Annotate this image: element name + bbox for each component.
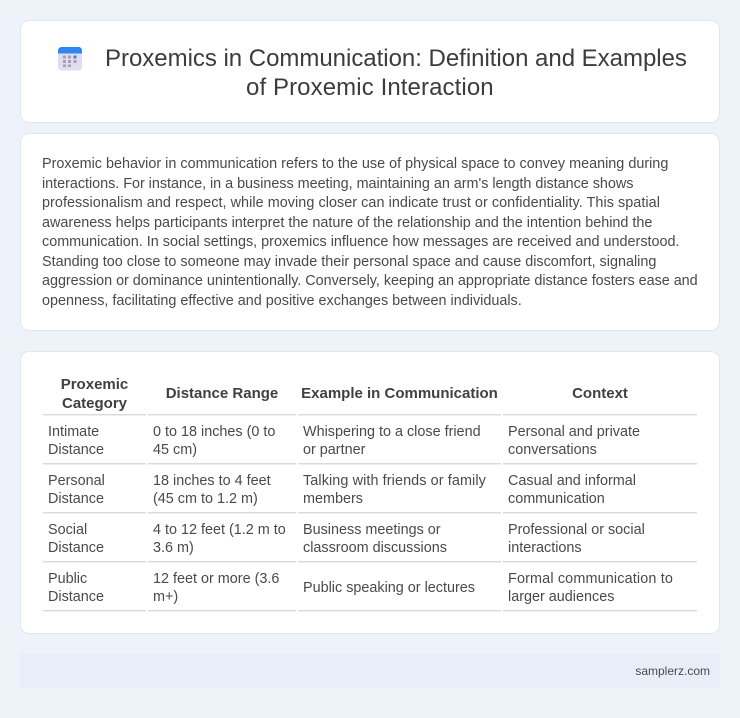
description text: professionalism and respect, while moving closer can indicate trust or confidentiality. This spatial [42, 195, 660, 211]
row: social distance [43, 522, 697, 563]
row: intimate distance: or partner [303, 442, 365, 458]
row: intimate distance: Intimate [48, 424, 99, 440]
row: intimate distance: Distance [48, 442, 104, 458]
title: Proxemics in Communication: Definition and Examples [105, 45, 687, 72]
row: intimate distance: Personal and private [508, 424, 640, 440]
row: public distance [43, 571, 697, 612]
row: intimate distance: Whispering to a close friend [303, 424, 481, 440]
row: public distance: Public speaking or lectures [303, 580, 475, 596]
row: social distance: Professional or social [508, 522, 645, 538]
row: public distance: Public [48, 571, 87, 587]
description text: Standing too close to someone may invade their personal space and cause discomfort, signaling [42, 254, 656, 270]
table header [43, 376, 697, 416]
description text: openness, facilitating effective and positive exchanges between individuals. [42, 292, 522, 308]
row: personal distance: 18 inches to 4 feet [153, 473, 271, 489]
title: of Proxemic Interaction [246, 74, 494, 101]
row: social distance: Business meetings or [303, 522, 441, 538]
row: personal distance [43, 473, 697, 514]
row: public distance: larger audiences [508, 589, 614, 605]
table [43, 376, 697, 612]
panel: description [20, 133, 720, 331]
row: social distance: 4 to 12 feet (1.2 m to [153, 522, 286, 538]
row: social distance: classroom discussions [303, 540, 447, 556]
description text [42, 156, 698, 308]
row: intimate distance: conversations [508, 442, 597, 458]
row: social distance: 3.6 m) [153, 540, 194, 556]
row: personal distance: Distance [48, 491, 104, 507]
table header: Context [572, 385, 628, 402]
icon: calendar [58, 47, 82, 70]
row: public distance: m+) [153, 589, 178, 605]
row: personal distance: Personal [48, 473, 105, 489]
row: personal distance: Casual and informal [508, 473, 636, 489]
row: personal distance: communication [508, 491, 605, 507]
description text: aggression or dominance unintentionally. Conversely, keeping an appropriate distance fosters ease and [42, 273, 698, 289]
row: social distance: Distance [48, 540, 104, 556]
row: social distance: Social [48, 522, 87, 538]
table header: Distance Range [166, 385, 278, 402]
description text: awareness helps participants interpret the nature of the relationship and the intention behind the [42, 214, 652, 230]
row: personal distance: (45 cm to 1.2 m) [153, 491, 258, 507]
title [105, 45, 687, 101]
row: social distance: interactions [508, 540, 582, 556]
footer text: samplerz.com [635, 664, 710, 678]
panel: table [20, 351, 720, 634]
row: public distance: 12 feet or more (3.6 [153, 571, 279, 587]
description text: Proxemic behavior in communication refers to the use of physical space to convey meaning during [42, 156, 668, 172]
description text: interactions. For instance, in a business meeting, maintaining an arm's length distance shows [42, 176, 633, 192]
row: public distance: Formal communication to [508, 571, 673, 587]
table header: Category [62, 395, 127, 412]
table header: Example in Communication [301, 385, 498, 402]
row: public distance: Distance [48, 589, 104, 605]
row: intimate distance: 45 cm) [153, 442, 197, 458]
row: intimate distance: 0 to 18 inches (0 to [153, 424, 275, 440]
row: intimate distance [43, 424, 697, 465]
table header: Proxemic [61, 376, 128, 393]
footer bar [20, 654, 720, 688]
row: personal distance: Talking with friends or family [303, 473, 486, 489]
row: personal distance: members [303, 491, 363, 507]
header panel [20, 20, 720, 123]
description text: communication. In social settings, proxemics influence how messages are received and understood. [42, 234, 680, 250]
